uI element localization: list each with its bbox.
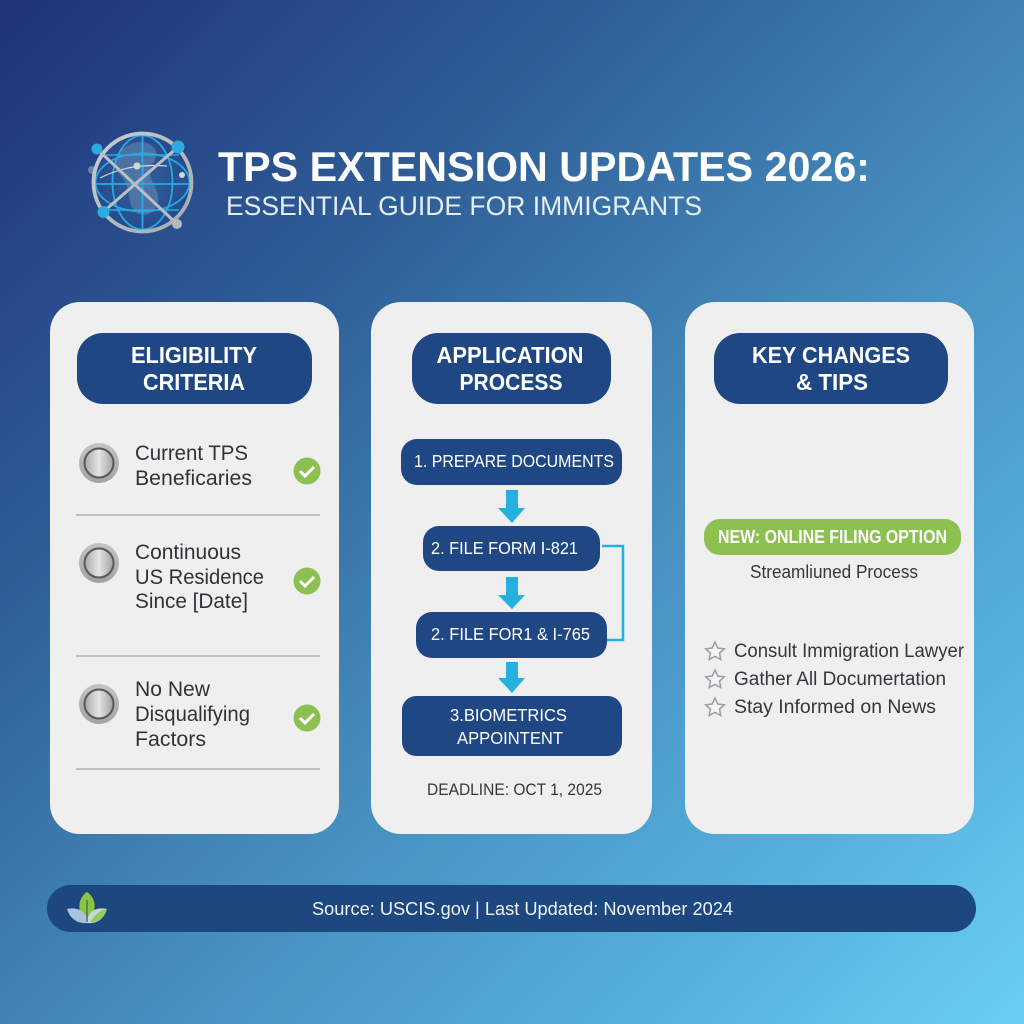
tip: consult lawyer: Consult Immigration Lawyer — [734, 641, 965, 662]
item: no new disqualifying factors: Disqualifying — [135, 702, 250, 726]
item: continuous US residence: US Residence — [135, 565, 264, 589]
callout subtext: Streamliuned Process — [750, 562, 918, 582]
step: file form I-821 — [423, 526, 600, 571]
arrow — [498, 490, 525, 523]
item: current TPS beneficiaries — [79, 441, 320, 490]
step: prepare documents — [401, 439, 622, 485]
step: file form I-821: 2. FILE FORM I-821 — [431, 538, 578, 558]
callout: online filing: NEW: ONLINE FILING OPTION — [718, 526, 947, 547]
heading: key changes and tips: KEY CHANGES — [752, 342, 910, 368]
item: continuous US residence — [79, 540, 320, 613]
heading: eligibility criteria — [77, 333, 312, 404]
arrow — [498, 662, 525, 693]
step: prepare documents: 1. PREPARE DOCUMENTS — [414, 451, 614, 471]
item: continuous US residence: Continuous — [135, 540, 241, 564]
panel: eligibility criteria — [50, 302, 339, 834]
step: biometrics appointment: APPOINTENT — [457, 728, 563, 748]
connector bracket — [602, 546, 623, 640]
subtitle: ESSENTIAL GUIDE FOR IMMIGRANTS — [226, 191, 702, 221]
item: no new disqualifying factors — [79, 677, 320, 751]
heading: application process: APPLICATION — [436, 342, 584, 368]
callout: online filing — [704, 519, 961, 555]
item: current TPS beneficiaries: Current TPS — [135, 441, 248, 465]
tip: stay informed: Stay Informed on News — [734, 697, 936, 718]
source line: Source: USCIS.gov | Last Updated: November 2024 — [312, 899, 733, 919]
heading: eligibility criteria: ELIGIBILITY — [131, 342, 257, 368]
heading: key changes and tips — [714, 333, 948, 404]
item: current TPS beneficiaries: Beneficaries — [135, 466, 252, 490]
icon: leaves — [67, 892, 107, 923]
deadline: DEADLINE: OCT 1, 2025 — [427, 780, 602, 799]
item: no new disqualifying factors: No New — [135, 677, 210, 701]
icon: globe network — [88, 134, 192, 232]
panel: application process — [371, 302, 652, 834]
item: continuous US residence: Since [Date] — [135, 589, 248, 613]
arrow — [498, 577, 525, 609]
title: TPS EXTENSION UPDATES 2026: — [218, 143, 870, 190]
tip: gather documentation: Gather All Documertation — [734, 669, 946, 690]
footer bar — [47, 885, 976, 932]
heading: application process: PROCESS — [460, 369, 562, 395]
step: biometrics appointment: 3.BIOMETRICS — [450, 705, 567, 725]
panel: key changes and tips — [685, 302, 974, 834]
item: no new disqualifying factors: Factors — [135, 727, 206, 751]
step: file form I-765: 2. FILE FOR1 & I-765 — [431, 624, 590, 644]
heading: application process — [412, 333, 611, 404]
step: file form I-765 — [416, 612, 607, 658]
step: biometrics appointment — [402, 696, 622, 756]
heading: eligibility criteria: CRITERIA — [143, 369, 245, 395]
heading: key changes and tips: & TIPS — [796, 369, 868, 395]
